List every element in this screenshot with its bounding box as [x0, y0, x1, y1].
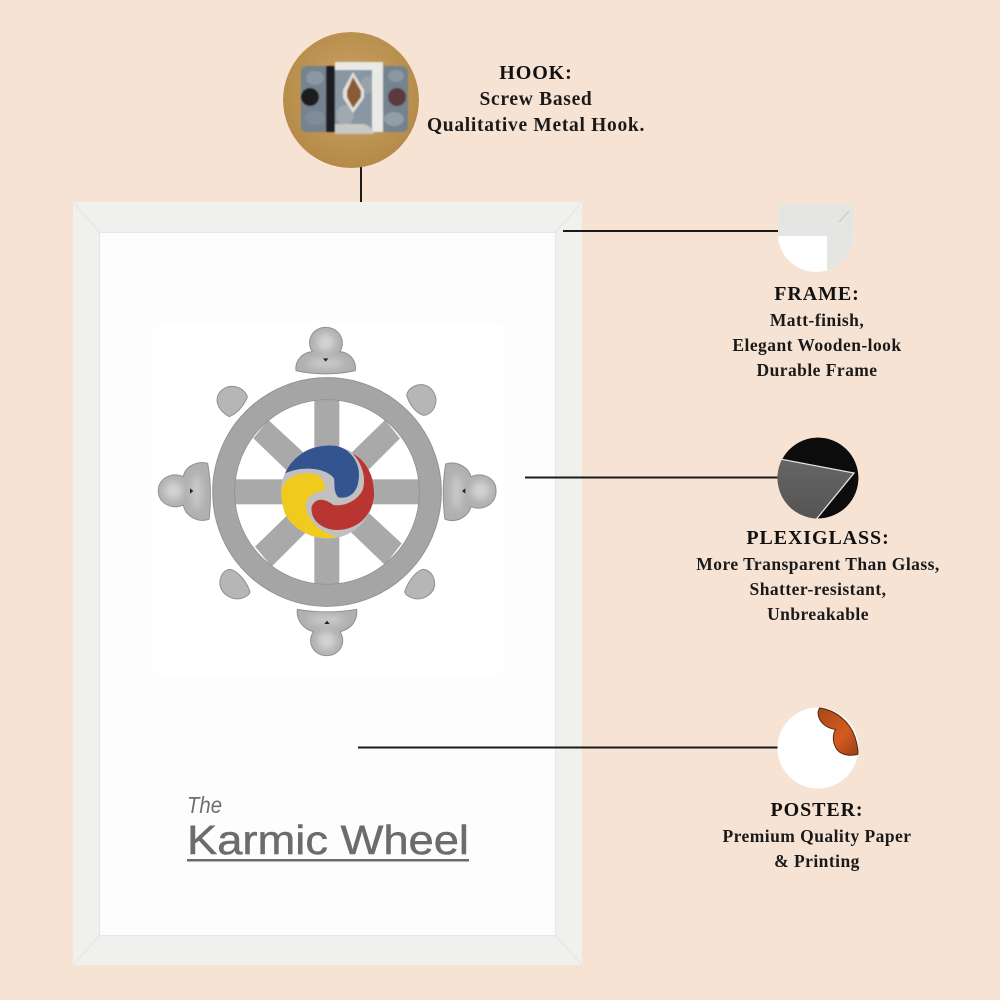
- wheel ring: [224, 389, 430, 595]
- diagonal ornaments: [217, 385, 436, 599]
- text: frame: Durable Frame: [756, 360, 878, 380]
- text: frame: FRAME:: [774, 283, 860, 305]
- blue swirl: [285, 446, 359, 498]
- poster title: [187, 792, 469, 863]
- red swirl: [311, 453, 374, 530]
- text: poster: & Printing: [774, 851, 860, 871]
- bottom ornament: [297, 609, 357, 656]
- icon: hook: [283, 32, 419, 168]
- left ornament: [158, 463, 210, 520]
- text: hook: Screw Based: [480, 89, 592, 110]
- text: frame: Matt-finish,: [770, 310, 864, 330]
- text: poster: [723, 799, 911, 871]
- picture frame: [73, 202, 582, 965]
- text: plexiglass: More Transparent Than Glass,: [696, 554, 940, 574]
- text: plexiglass: Shatter-resistant,: [750, 579, 886, 599]
- text: frame: [732, 283, 902, 380]
- karmic wheel: Karmic Wheel: [187, 817, 469, 863]
- text: poster: POSTER:: [771, 799, 863, 821]
- text: plexiglass: Unbreakable: [767, 604, 869, 624]
- text: plexiglass: [696, 527, 940, 624]
- icon: frame corner: [778, 204, 854, 272]
- icon: poster corner: [778, 708, 858, 788]
- text: plexiglass: PLEXIGLASS:: [746, 527, 890, 549]
- connector: hook: [360, 167, 362, 202]
- the: The: [187, 792, 222, 818]
- text: poster: Premium Quality Paper: [723, 826, 911, 846]
- yellow swirl: [282, 473, 337, 538]
- connector: poster: [358, 746, 778, 748]
- spokes: [232, 397, 422, 587]
- connector: plexiglass: [525, 476, 778, 478]
- top ornament: [296, 327, 356, 374]
- karmic wheel artwork: [158, 327, 496, 656]
- swirl centre: [281, 445, 374, 539]
- text: hook: [427, 62, 645, 136]
- artwork panel: [152, 323, 505, 676]
- text: hook: HOOK:: [499, 62, 573, 84]
- text: hook: Qualitative Metal Hook.: [427, 115, 645, 136]
- connector: frame: [563, 230, 778, 232]
- text: frame: Elegant Wooden-look: [732, 335, 902, 355]
- icon: plexiglass: [775, 438, 858, 522]
- poster: [100, 233, 555, 935]
- right ornament: [443, 463, 496, 521]
